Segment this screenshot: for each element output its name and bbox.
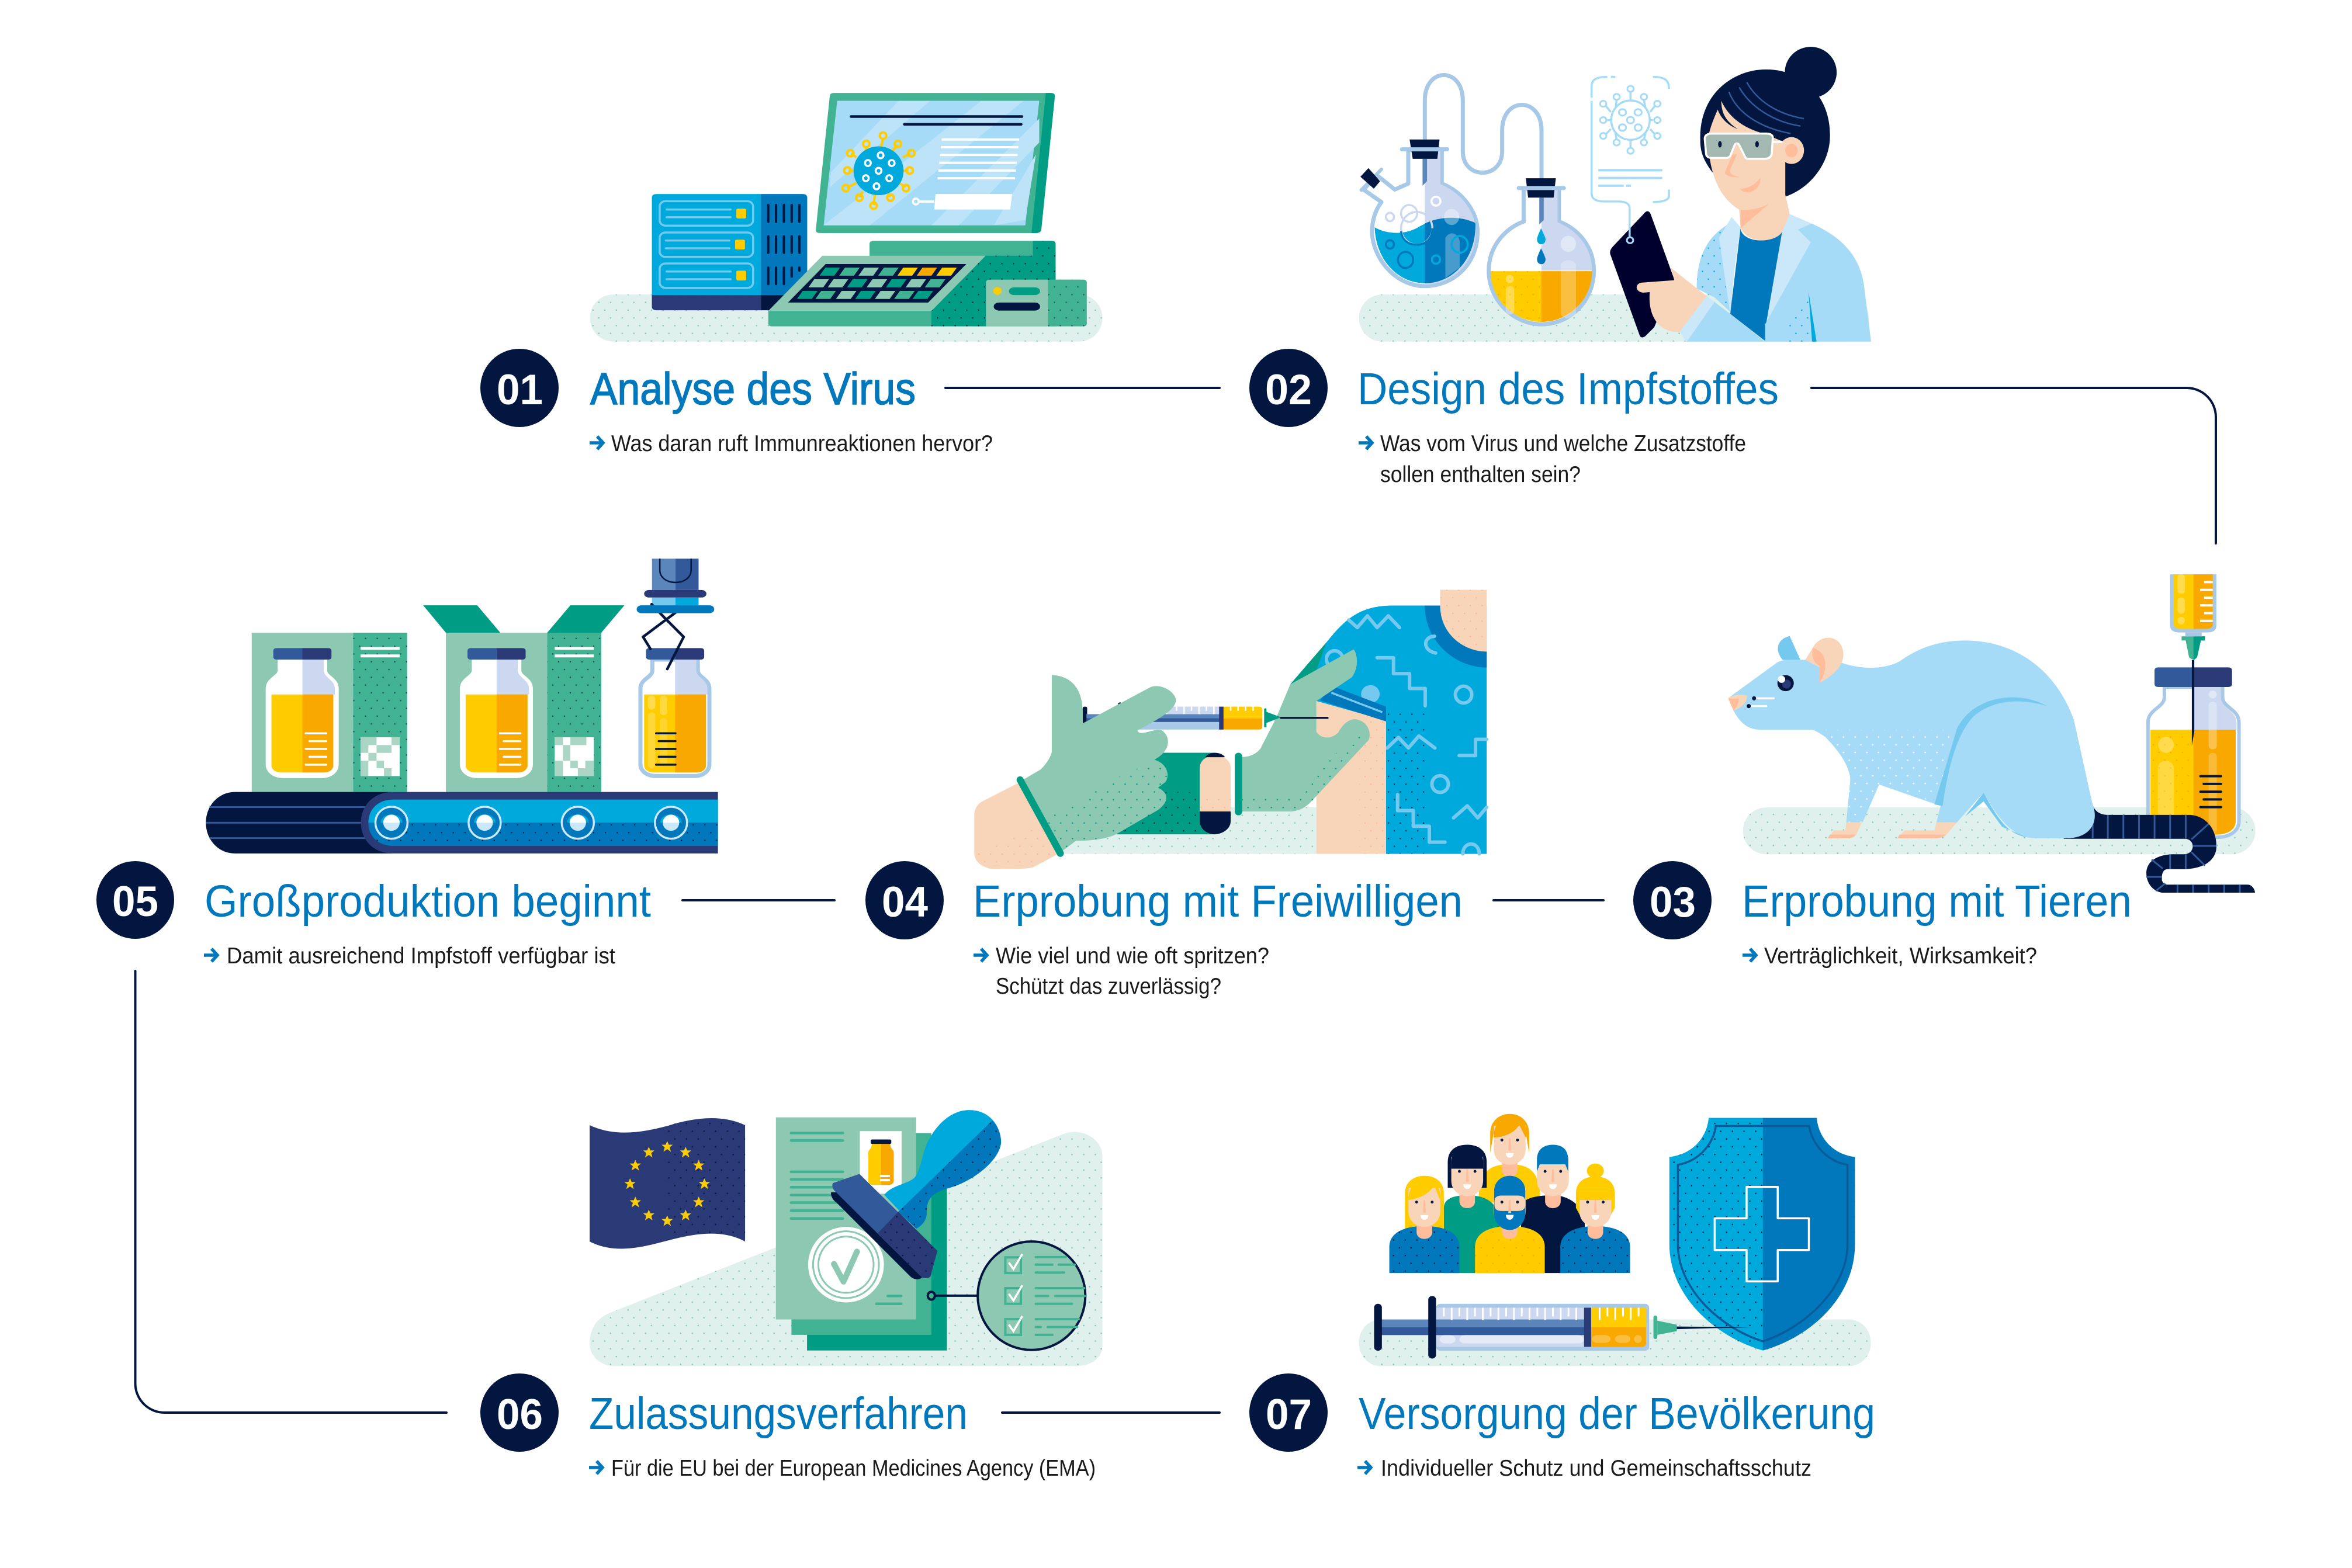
- ground pill: [1743, 807, 2256, 854]
- ground shape: [590, 1132, 1102, 1366]
- person left blue shirt: [1390, 1176, 1460, 1273]
- text 07: Individueller Schutz und Gemeinschaftsschutz: [1381, 1456, 1811, 1481]
- carton 2: [423, 605, 625, 792]
- connector: 04 to 05: [683, 899, 834, 901]
- tablet: [1610, 211, 1674, 338]
- vial in gripper: [640, 648, 709, 776]
- shield: [1669, 1118, 1855, 1351]
- heading 06: Zulassungsverfahren: [589, 1389, 968, 1439]
- illustration 05: vial production line: [206, 558, 718, 854]
- illustration 02: flasks and scientist: [1359, 47, 1871, 342]
- person back orange hair: [1478, 1114, 1540, 1203]
- vial label: [860, 1131, 902, 1194]
- text 03: Verträglichkeit, Wirksamkeit?: [1764, 943, 2037, 969]
- ground pill: [1359, 1320, 1871, 1366]
- illustration 06: EU approval: [590, 1110, 1102, 1366]
- face and neck: [1708, 100, 1790, 240]
- text 02: Was vom Virus und welche Zusatzstoffe: [1380, 431, 1746, 456]
- holographic virus card: [1592, 77, 1669, 243]
- ground pill: [1050, 807, 1317, 854]
- text 02: sollen enthalten sein?: [1380, 462, 1581, 487]
- shirt pattern: [1326, 616, 1487, 854]
- badge 01: 01: [497, 366, 543, 414]
- hand: [1637, 268, 1706, 332]
- badge 02: [1249, 349, 1328, 427]
- right gloved hand: [1242, 650, 1370, 811]
- heading 01: Analyse des Virus: [590, 364, 916, 414]
- virus on screen: [843, 133, 915, 209]
- ground pill: [590, 294, 1103, 342]
- person center beard: [1475, 1176, 1545, 1273]
- badge 05: 05: [112, 878, 158, 925]
- heading 05: Großproduktion beginnt: [205, 876, 651, 927]
- group of people: [1390, 1114, 1630, 1273]
- connector: 01 to 02: [945, 387, 1220, 389]
- monitor: [816, 93, 1055, 233]
- badge 04: 04: [882, 879, 928, 926]
- text 01: Was daran ruft Immunreaktionen hervor?: [611, 431, 993, 456]
- badge 03: 03: [1650, 879, 1696, 926]
- disk drive box: [986, 280, 1087, 327]
- connector: 03 to 04: [1494, 899, 1603, 901]
- person right bun: [1560, 1164, 1630, 1273]
- badge 05: [96, 861, 174, 939]
- person navy shirt: [1521, 1144, 1585, 1273]
- carton 1: [252, 633, 407, 792]
- badge 03: [1633, 861, 1712, 939]
- glass tube: [1425, 75, 1542, 180]
- text 02: [1359, 431, 1746, 487]
- approval seal: [808, 1227, 884, 1303]
- text 06: Für die EU bei der European Medicines Agency (EMA): [611, 1456, 1096, 1481]
- connector: 06 to 07: [1002, 1411, 1220, 1414]
- illustration 07: population protected: [1359, 1114, 1871, 1366]
- left gloved hand: [1020, 675, 1176, 854]
- flask with blue liquid: [1360, 140, 1478, 286]
- flask with yellow liquid: [1489, 178, 1594, 324]
- syringe: [1374, 1296, 1750, 1359]
- goggles: [1705, 134, 1773, 159]
- badge 01: [480, 349, 559, 427]
- connector: 05 to 06: [136, 971, 446, 1413]
- conveyor belt: [206, 792, 718, 854]
- ground pill: [1359, 294, 1869, 342]
- robot gripper: [637, 558, 714, 669]
- badge 07: [1249, 1373, 1328, 1452]
- illustration 04: vaccination of a volunteer: [974, 590, 1487, 869]
- upper arm: [1317, 686, 1386, 854]
- vial: [2148, 667, 2239, 837]
- scientist: [1610, 47, 1871, 342]
- EU flag: [590, 1118, 745, 1248]
- computer base and keyboard: [768, 241, 1056, 327]
- magnified checklist: [928, 1241, 1085, 1350]
- server rack: [652, 194, 807, 310]
- illustration 01: computer analysing virus: [590, 93, 1103, 342]
- text 04: Schützt das zuverlässig?: [996, 974, 1221, 999]
- rollers: [375, 807, 687, 839]
- badge 06: [480, 1373, 559, 1452]
- badge 04: [865, 861, 944, 939]
- connector: 02 to 03: [1811, 388, 2216, 543]
- text 05: Damit ausreichend Impfstoff verfügbar ist: [227, 943, 615, 969]
- syringe above vial: [2170, 574, 2216, 746]
- hair: [1700, 47, 1837, 197]
- rat body: [1729, 636, 2095, 838]
- lab coat and shirt: [1697, 224, 1733, 314]
- stamp: [831, 1110, 1001, 1279]
- heading 04: Erprobung mit Freiwilligen: [973, 876, 1463, 927]
- volunteer shirt: [1290, 590, 1487, 854]
- text 04: Wie viel und wie oft spritzen?: [996, 943, 1269, 969]
- badge 06: 06: [497, 1391, 543, 1438]
- doctor wrist: [1200, 753, 1242, 834]
- badge 07: 07: [1266, 1391, 1312, 1438]
- illustration 03: rat with vial and syringe: [1729, 574, 2256, 893]
- forearm left: [974, 782, 1059, 869]
- document stack: [776, 1118, 947, 1351]
- tail: [2063, 803, 2255, 893]
- heading 02: Design des Impfstoffes: [1357, 364, 1779, 414]
- text 04: [974, 943, 1269, 999]
- syringe: [1083, 702, 1328, 730]
- doctor sleeve: [1117, 753, 1216, 834]
- person green shirt: [1444, 1144, 1500, 1273]
- heading 07: Versorgung der Bevölkerung: [1359, 1389, 1875, 1439]
- heading 03: Erprobung mit Tieren: [1742, 876, 2132, 927]
- badge 02: 02: [1265, 366, 1312, 414]
